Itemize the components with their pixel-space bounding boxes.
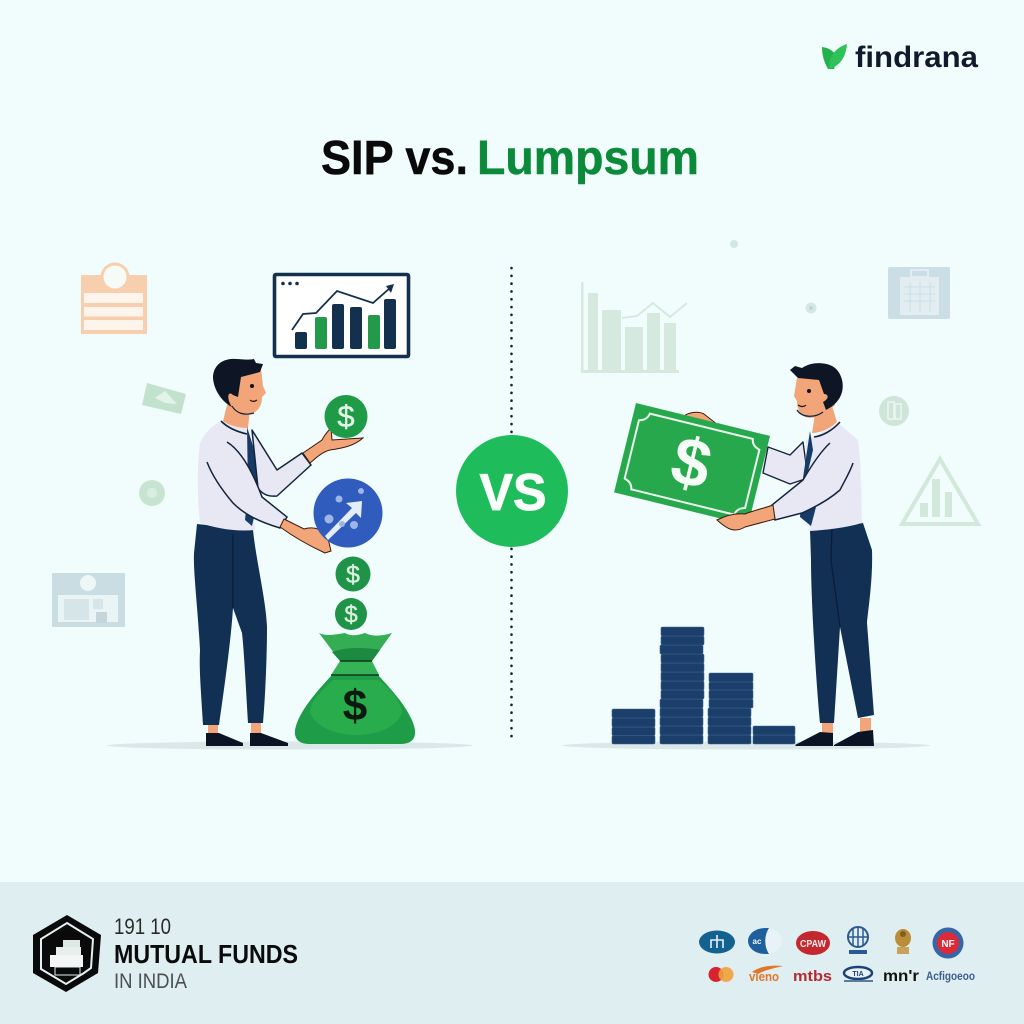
icon: faded calendar: [81, 262, 147, 334]
logo: overlapping circles: [708, 967, 734, 982]
collar: [221, 421, 247, 434]
title: Lumpsum: [477, 132, 699, 185]
trousers: [810, 523, 874, 723]
icon: leaf: [822, 44, 847, 69]
shirt torso: [198, 421, 255, 531]
logo: navy oval: [844, 967, 873, 982]
head: [226, 368, 266, 414]
coin stacks: [612, 627, 795, 744]
footer heading text: MUTUAL FUNDS: [114, 939, 298, 969]
front arm: [772, 443, 853, 520]
logo: red oval: [796, 931, 830, 955]
trend arrow: [292, 284, 394, 330]
collar: [814, 422, 840, 437]
stack 3: [708, 673, 753, 744]
footer heading text: [114, 914, 298, 993]
ankles: [822, 718, 871, 734]
stack 1: [612, 709, 655, 744]
stack 2: [660, 627, 704, 744]
eye and mouth: [797, 389, 823, 416]
coin in hand: [324, 395, 368, 438]
logo: blue emblem: [848, 927, 868, 954]
ground shadows: [107, 742, 930, 750]
footer band: [0, 882, 1024, 1024]
logo: blue oval: [699, 930, 735, 954]
head: [794, 376, 835, 418]
neck: [812, 406, 837, 433]
shirt torso: [805, 423, 862, 531]
upper arm holding coin: [252, 430, 311, 496]
logo: vieno: vieno: [749, 969, 779, 984]
logo: gold emblem: [895, 929, 911, 954]
footer heading text: 191 10: [114, 914, 171, 939]
falling coins: $: [346, 561, 360, 589]
tie: [245, 427, 260, 526]
hair: [213, 359, 263, 407]
footer heading text: IN INDIA: [114, 970, 187, 993]
chart bars: [295, 299, 396, 349]
icon: faded banknote: [142, 383, 186, 414]
VS badge: [456, 435, 568, 547]
logo: red round seal: NF: [941, 939, 955, 950]
VS badge: VS: [480, 464, 546, 522]
shoes: [795, 730, 874, 746]
ankles: [208, 723, 261, 734]
back arm: [763, 442, 808, 484]
logo: navy oval: TIA: [852, 971, 864, 978]
footer emblem: hexagon: [33, 915, 101, 992]
wordmark: findrana: [855, 41, 978, 74]
icon: faded bank building: [52, 573, 125, 627]
lower hand: [717, 505, 775, 530]
icon: faded briefcase calendar: [888, 267, 950, 319]
bill: $: [664, 422, 719, 504]
banknote held up: [614, 403, 770, 525]
icon: faded warning triangle: [902, 459, 978, 524]
falling coins: $: [344, 602, 358, 628]
icon: faded bar chart: [581, 282, 687, 373]
coin in hand: $: [337, 399, 355, 434]
icon: faded round badge: [879, 396, 909, 426]
money bag: $: [343, 682, 367, 730]
falling coins: [335, 556, 370, 630]
dotted divider: [510, 268, 513, 740]
logo: mtbs: mtbs: [793, 968, 832, 985]
partner logos: [699, 927, 975, 985]
bill: [614, 403, 770, 525]
upper hand: [303, 428, 363, 463]
logo: half blue circle: [748, 928, 782, 954]
stack 4: [753, 726, 795, 744]
logo: red oval: CPAW: [800, 939, 826, 950]
lower arm: [207, 442, 287, 528]
chart window: growth: [274, 274, 408, 356]
window dots: [281, 282, 299, 285]
shoes: [206, 733, 288, 746]
title: SIP vs.: [321, 132, 468, 185]
eye and mouth: [232, 384, 257, 414]
faded background icons: left: [52, 262, 186, 627]
growth circle: blue: [314, 478, 382, 548]
person: right investor (lumpsum): [614, 363, 874, 746]
person: left investor (SIP): [194, 359, 363, 746]
faded background icons: right: [581, 240, 978, 524]
lower hand: [280, 519, 331, 553]
hair: [790, 363, 843, 410]
trousers: [194, 524, 267, 725]
tie: [800, 431, 816, 526]
title: [321, 132, 699, 185]
logo: mnr: mn'r: [883, 968, 919, 985]
logo: red round seal: [932, 928, 964, 958]
brand logo: findrana: [822, 41, 978, 74]
upper hand: [683, 412, 718, 425]
icon: faded dots: [730, 240, 816, 314]
icon: faded coin: [139, 480, 165, 506]
neck: [223, 405, 250, 428]
logo: Acfigoeoo: Acfigoeoo: [926, 969, 975, 983]
money bag: [295, 633, 415, 744]
logo: half blue circle: ac: [753, 937, 762, 946]
